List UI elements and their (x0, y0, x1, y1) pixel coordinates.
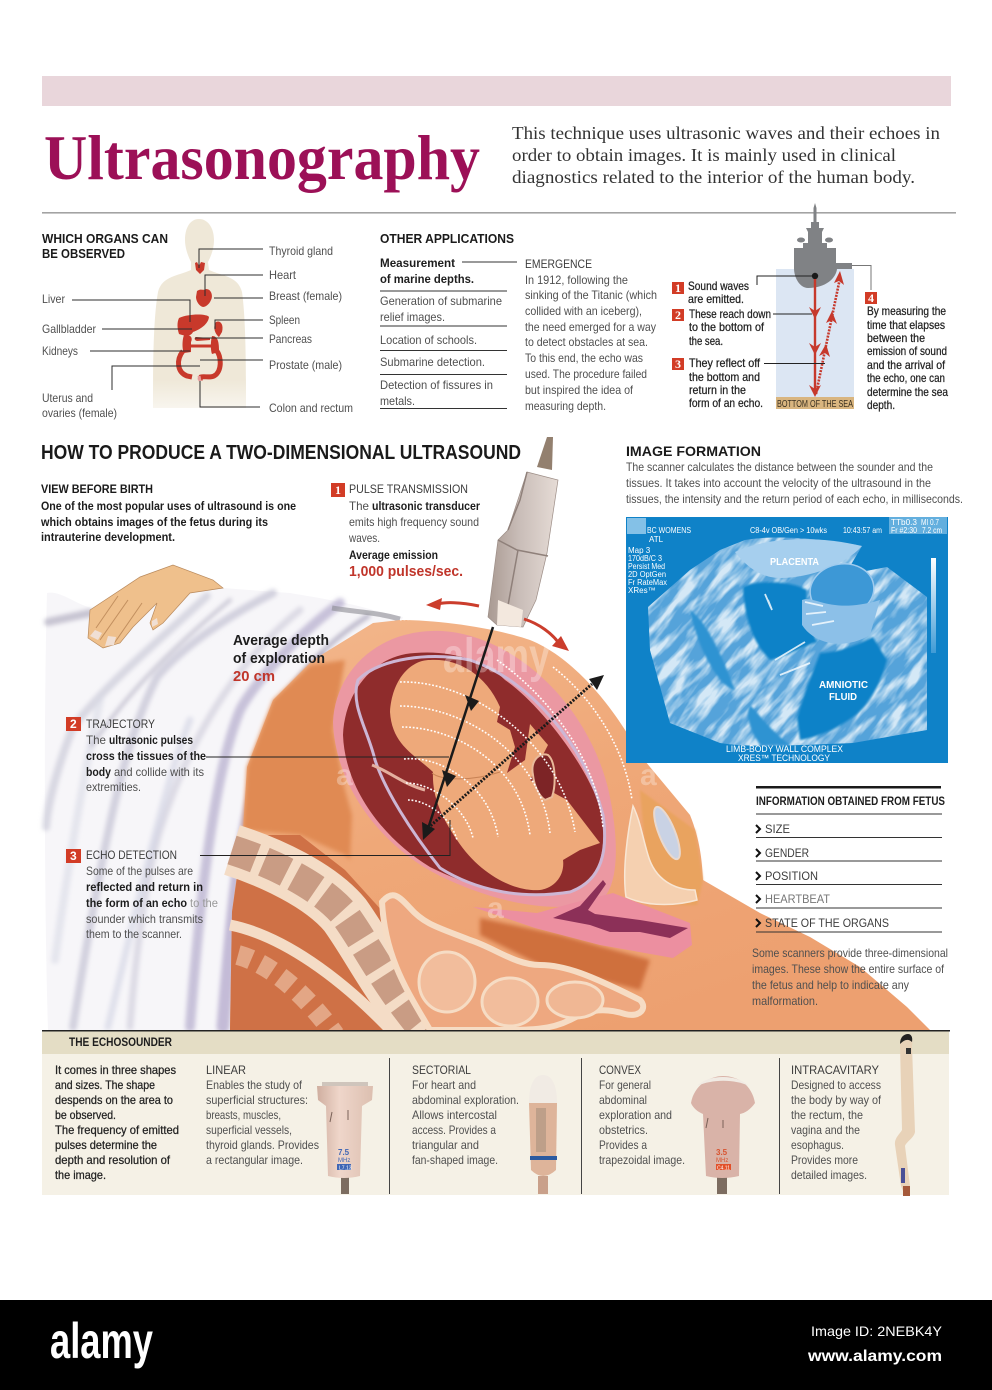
amniotic dark cavities (743, 582, 817, 660)
scan labels: PLACENTA (770, 557, 819, 568)
three-dimensional note: Some scanners provide three-dimensional (752, 946, 948, 960)
step 4: and the arrival of (867, 358, 946, 372)
uterine cavity (343, 652, 603, 896)
information list: SIZE (765, 822, 790, 836)
scan labels: Fr RateMax (628, 578, 667, 587)
information list: STATE OF THE ORGANS (765, 916, 889, 930)
main heading: HOW TO PRODUCE A TWO-DIMENSIONAL ULTRASOUND (41, 442, 521, 464)
three-dimensional note: images. These show the entire surface of (752, 962, 945, 976)
icon: convex probe: MHz (716, 1158, 728, 1164)
step 2: 2 (675, 308, 681, 322)
emergence text: but inspired the idea of (525, 383, 634, 397)
scan labels: 10:43:57 am (843, 526, 882, 535)
icon: convex probe: 3.5 (716, 1148, 728, 1157)
ship (794, 203, 852, 288)
footer url: www.alamy.com (807, 1348, 942, 1365)
echo arrow (428, 675, 604, 828)
callout: pulse transmission: The (349, 499, 369, 513)
linear probe text: superficial vessels, (206, 1123, 292, 1137)
pubic bone (649, 804, 685, 862)
callout: pulse transmission: emits high frequency sound (349, 515, 479, 529)
applications list: metals. (380, 394, 415, 408)
scan labels: FLUID (829, 692, 857, 703)
callout: echo detection: ECHO DETECTION (86, 848, 177, 862)
linear probe text: Enables the study of (206, 1078, 303, 1092)
intracavitary probe text (791, 1063, 882, 1182)
bladder area (625, 806, 697, 904)
callout: pulse transmission: PULSE TRANSMISSION (349, 482, 468, 496)
sectorial probe text: access. Provides a (412, 1123, 496, 1137)
scan scale (931, 558, 936, 653)
echosounder intro: despends on the area to (55, 1093, 173, 1107)
leader lines (757, 276, 825, 364)
applications list: of marine depths. (380, 272, 474, 286)
sea water (776, 269, 854, 397)
step 4: between the (867, 331, 925, 345)
intracavitary probe text: Designed to access (791, 1078, 881, 1092)
intracavitary probe text: Provides more (791, 1153, 858, 1167)
organ labels: Uterus and (42, 391, 93, 405)
step 4: emission of sound (867, 344, 947, 358)
linear probe text (206, 1063, 319, 1167)
scan labels: C8-4v OB/Gen > 10wks (750, 526, 827, 535)
scan labels: BC WOMENS (647, 526, 691, 535)
alamy watermark marks: a (336, 759, 353, 792)
fetus (390, 660, 600, 890)
convex probe text: CONVEX (599, 1063, 641, 1077)
heading: information: INFORMATION OBTAINED FROM FETUS (756, 794, 945, 808)
organ labels: Gallbladder (42, 322, 96, 336)
heading: organs: WHICH ORGANS CAN (42, 231, 168, 246)
intracavitary probe text: the rectum, the (791, 1108, 863, 1122)
swing arrows (426, 598, 569, 651)
echosounder heading: THE ECHOSOUNDER (69, 1035, 172, 1049)
intro text (512, 123, 940, 187)
echosounder intro: pulses determine the (55, 1138, 157, 1152)
step 1 (672, 279, 749, 306)
sectorial probe text: For heart and (412, 1078, 476, 1092)
pulse arrow (422, 627, 493, 840)
applications list: Location of schools. (380, 333, 477, 347)
image formation text (626, 460, 963, 506)
callout: trajectory: 2 (70, 717, 77, 731)
callout: trajectory: extremities. (86, 780, 141, 794)
step 3: the bottom and (689, 370, 760, 384)
applications list: Submarine detection. (380, 355, 485, 369)
intracavitary probe text: vagina and the (791, 1123, 860, 1137)
icon: linear probe: L7.13 (339, 1166, 352, 1172)
echosounder intro: The frequency of emitted (55, 1123, 179, 1137)
placenta (735, 539, 862, 578)
sectorial probe text: abdominal exploration. (412, 1093, 519, 1107)
step 4: the echo, one can (867, 371, 945, 385)
umbilical cord and placenta spot (372, 765, 425, 790)
icon: convex probe (691, 1076, 755, 1194)
text block: view before birth: VIEW BEFORE BIRTH (41, 482, 153, 496)
convex probe text (599, 1063, 685, 1167)
step 3: 3 (675, 357, 681, 371)
step 1: Sound waves (688, 279, 749, 293)
callout: pulse transmission (331, 482, 480, 580)
scan labels: 170dB/C 3 (628, 554, 662, 563)
icon: linear probe (317, 1082, 373, 1194)
emergence text: collided with an iceberg), (525, 304, 642, 318)
applications list: Measurement (380, 256, 455, 270)
three-dimensional note: the fetus and help to indicate any (752, 978, 909, 992)
emergence text: the need emerged for a way (525, 320, 656, 334)
convex probe text: abdominal (599, 1093, 647, 1107)
callout: pulse transmission: Average emission (349, 548, 438, 562)
panel background (42, 1031, 949, 1195)
callout: echo detection: reflected and return in (86, 880, 203, 894)
intracavitary probe text: esophagus. (791, 1138, 844, 1152)
emergence text (525, 257, 657, 413)
organ labels: ovaries (female) (42, 406, 117, 420)
information list (756, 814, 942, 932)
echosounder intro (55, 1063, 179, 1182)
transducer (488, 437, 558, 627)
step 4: determine the sea (867, 385, 948, 399)
sound wave arcs (400, 619, 632, 840)
title: Ultrasonography (44, 122, 480, 193)
callout: trajectory: TRAJECTORY (86, 717, 155, 731)
callout: trajectory: ultrasonic pulses (109, 733, 193, 747)
callout: trajectory: The (86, 733, 106, 747)
emergence text: to detect obstacles at sea. (525, 335, 648, 349)
icon: sectorial probe (529, 1075, 557, 1194)
step 4: depth. (867, 398, 895, 412)
scan labels: AMNIOTIC (819, 680, 868, 691)
convex probe text: obstetrics. (599, 1123, 648, 1137)
callout: average depth (233, 632, 329, 685)
callout: trajectory (66, 717, 206, 794)
intracavitary probe text: detailed images. (791, 1168, 867, 1182)
footer logo: alamy (50, 1313, 153, 1369)
intestine (382, 895, 643, 1030)
organ labels: Thyroid gland (269, 244, 333, 258)
callout: echo detection: sounder which transmits (86, 912, 203, 926)
applications list (380, 256, 517, 408)
information list: POSITION (765, 869, 818, 883)
intro text: diagnostics related to the interior of the human body. (512, 167, 915, 187)
callout: trajectory: cross the tissues of the (86, 749, 206, 763)
callout: average depth: Average depth (233, 632, 329, 649)
step 2: to the bottom of (689, 320, 765, 334)
panel: which organs can be observed (42, 219, 353, 420)
header banner (42, 76, 951, 106)
echosounder intro: depth and resolution of (55, 1153, 171, 1167)
scan labels: TTb0.3 (891, 518, 918, 527)
organ labels: Spleen (269, 313, 300, 327)
applications list: Generation of submarine (380, 294, 502, 308)
organs in red (178, 262, 223, 381)
step 4: 4 (868, 291, 874, 305)
linear probe text: thyroid glands. Provides (206, 1138, 319, 1152)
scan labels: XRes™ (628, 586, 656, 595)
uterus wall (333, 631, 616, 907)
echo streaks (765, 594, 834, 675)
alamy watermark marks: alamy (443, 630, 550, 683)
callout: pulse transmission: 1 (335, 483, 341, 497)
sectorial probe text: triangular and (412, 1138, 479, 1152)
alamy watermark marks (336, 630, 657, 925)
panel: anatomical illustration (45, 437, 930, 1040)
panel: other applications (380, 231, 657, 413)
echosounder intro: It comes in three shapes (55, 1063, 176, 1077)
convex probe text: Provides a (599, 1138, 647, 1152)
heading: organs: BE OBSERVED (42, 246, 125, 261)
intracavitary probe text: INTRACAVITARY (791, 1063, 879, 1077)
heading: organs (42, 231, 168, 261)
step 2: These reach down (689, 307, 771, 321)
cervix and vaginal canal (473, 893, 692, 958)
organ labels: Breast (female) (269, 289, 342, 303)
footer image id: Image ID: 2NEBK4Y (811, 1323, 943, 1339)
organ labels: Kidneys (42, 344, 78, 358)
icon: intracavitary probe (895, 1034, 915, 1196)
sectorial probe text: fan-shaped image. (412, 1153, 498, 1167)
leader lines (200, 757, 450, 856)
step 3 (672, 356, 763, 410)
emergence text: EMERGENCE (525, 257, 592, 271)
step 3: form of an echo. (689, 396, 763, 410)
information list: GENDER (765, 846, 809, 860)
callout: echo detection: the form of an echo (86, 896, 187, 910)
scan labels: Persist Med (628, 562, 665, 571)
linear probe text: breasts, muscles, (206, 1108, 281, 1122)
scan labels: ATL (649, 535, 664, 544)
scan labels: Map 3 (628, 546, 651, 555)
organ labels (42, 244, 353, 420)
image formation text: The scanner calculates the distance between the sounder and the (626, 460, 933, 474)
scan fan (648, 538, 927, 746)
echosounder intro: be observed. (55, 1108, 116, 1122)
scan labels: LIMB-BODY WALL COMPLEX (726, 744, 843, 754)
step 3: return in the (689, 383, 746, 397)
spine (230, 850, 428, 1040)
sectorial probe text (412, 1063, 519, 1167)
callout: echo detection: 3 (70, 849, 77, 863)
three-dimensional note: malformation. (752, 994, 818, 1008)
scan labels: 2D OptGen (628, 570, 666, 579)
ultrasound scan image (626, 517, 948, 763)
convex probe text: trapezoidal image. (599, 1153, 685, 1167)
callout: echo detection: to the (190, 896, 218, 910)
callout: average depth: of exploration (233, 650, 325, 667)
step 4 (865, 291, 948, 412)
text block: view before birth: which obtains images of the fetus during its (40, 515, 268, 529)
text block: view before birth: intrauterine development. (41, 530, 175, 544)
callout: trajectory: body (86, 765, 111, 779)
sound arrows (809, 271, 844, 397)
panel: the echosounder (42, 1030, 950, 1196)
organ labels: Pancreas (269, 332, 312, 346)
step 4: By measuring the (867, 304, 946, 318)
step 1: are emitted. (688, 292, 744, 306)
linear probe text: superficial structures: (206, 1093, 308, 1107)
organ labels: Prostate (male) (269, 358, 342, 372)
step 3: They reflect off (689, 356, 761, 370)
panel: information obtained from fetus (752, 786, 948, 1008)
emergence text: measuring depth. (525, 399, 606, 413)
organ labels: Colon and rectum (269, 401, 353, 415)
callout: trajectory: and collide with its (114, 765, 204, 779)
text block: view before birth (40, 482, 296, 544)
applications list: Detection of fissures in (380, 378, 493, 392)
sea bottom: BOTTOM OF THE SEA (777, 399, 853, 410)
amniotic membrane (356, 657, 605, 895)
cloth (45, 577, 403, 1030)
alamy watermark marks: a (640, 759, 657, 792)
heading: other applications: OTHER APPLICATIONS (380, 231, 514, 246)
organ labels: Liver (42, 292, 65, 306)
emergence text: sinking of the Titanic (which (525, 288, 657, 302)
step 4: time that elapses (867, 318, 945, 332)
fetal head (806, 559, 878, 621)
organ leader lines (72, 249, 263, 407)
scan labels: Fr #2:30 (891, 526, 917, 535)
emergence text: To this end, the echo was (525, 351, 643, 365)
body silhouette (153, 219, 246, 408)
three-dimensional note (752, 946, 948, 1008)
alamy watermark marks: a (487, 892, 504, 925)
callout: pulse transmission: waves. (348, 531, 380, 545)
intro text: This technique uses ultrasonic waves and their echoes in (512, 123, 940, 143)
echosounder intro: the image. (55, 1168, 106, 1182)
image formation text: tissues. It takes into account the velocity of the ultrasound in the (626, 476, 931, 490)
callout: echo detection (66, 848, 218, 941)
scan labels: MI 0.7 (921, 518, 939, 527)
callout: echo detection: them to the scanner. (86, 927, 182, 941)
scan labels: 7.2 cm (922, 526, 942, 535)
step 2: the sea. (689, 334, 723, 348)
sectorial probe text: SECTORIAL (412, 1063, 471, 1077)
callout: pulse transmission: ultrasonic transducer (372, 499, 480, 513)
heading: image formation: IMAGE FORMATION (626, 443, 761, 459)
echosounder intro: and sizes. The shape (55, 1078, 155, 1092)
callout: average depth: 20 cm (233, 668, 275, 685)
sea bottom (776, 397, 854, 410)
information list: HEARTBEAT (765, 892, 831, 906)
linear probe text: LINEAR (206, 1063, 246, 1077)
step 1: 1 (675, 281, 681, 295)
text block: view before birth: One of the most popular uses of ultrasound is one (41, 499, 296, 513)
linear probe text: a rectangular image. (206, 1153, 303, 1167)
emergence text: In 1912, following the (525, 273, 628, 287)
scan labels: XRES™ TECHNOLOGY (738, 753, 830, 763)
icon: convex probe: C4.11 (717, 1166, 730, 1172)
lower back tissue (230, 660, 703, 1030)
intro text: order to obtain images. It is mainly used in clinical (512, 145, 896, 165)
icon: linear probe: MHz (338, 1158, 350, 1164)
step 2 (672, 307, 771, 348)
convex probe text: For general (599, 1078, 651, 1092)
hand (88, 565, 223, 648)
scan labels (628, 518, 942, 763)
emergence text: used. The procedure failed (525, 367, 647, 381)
callout: pulse transmission: 1,000 pulses/sec. (349, 563, 463, 580)
applications list: relief images. (380, 310, 445, 324)
callout: echo detection: Some of the pulses are (86, 864, 193, 878)
intracavitary probe text: the body by way of (791, 1093, 882, 1107)
footer bar (0, 1300, 992, 1390)
abdomen (230, 620, 930, 1030)
organ labels: Heart (269, 268, 297, 282)
convex probe text: exploration and (599, 1108, 672, 1122)
panel: image formation (626, 446, 962, 763)
sectorial probe text: Allows intercostal (412, 1108, 497, 1122)
panel: ship sonar diagram (672, 203, 948, 412)
icon: linear probe: 7.5 (338, 1148, 350, 1157)
